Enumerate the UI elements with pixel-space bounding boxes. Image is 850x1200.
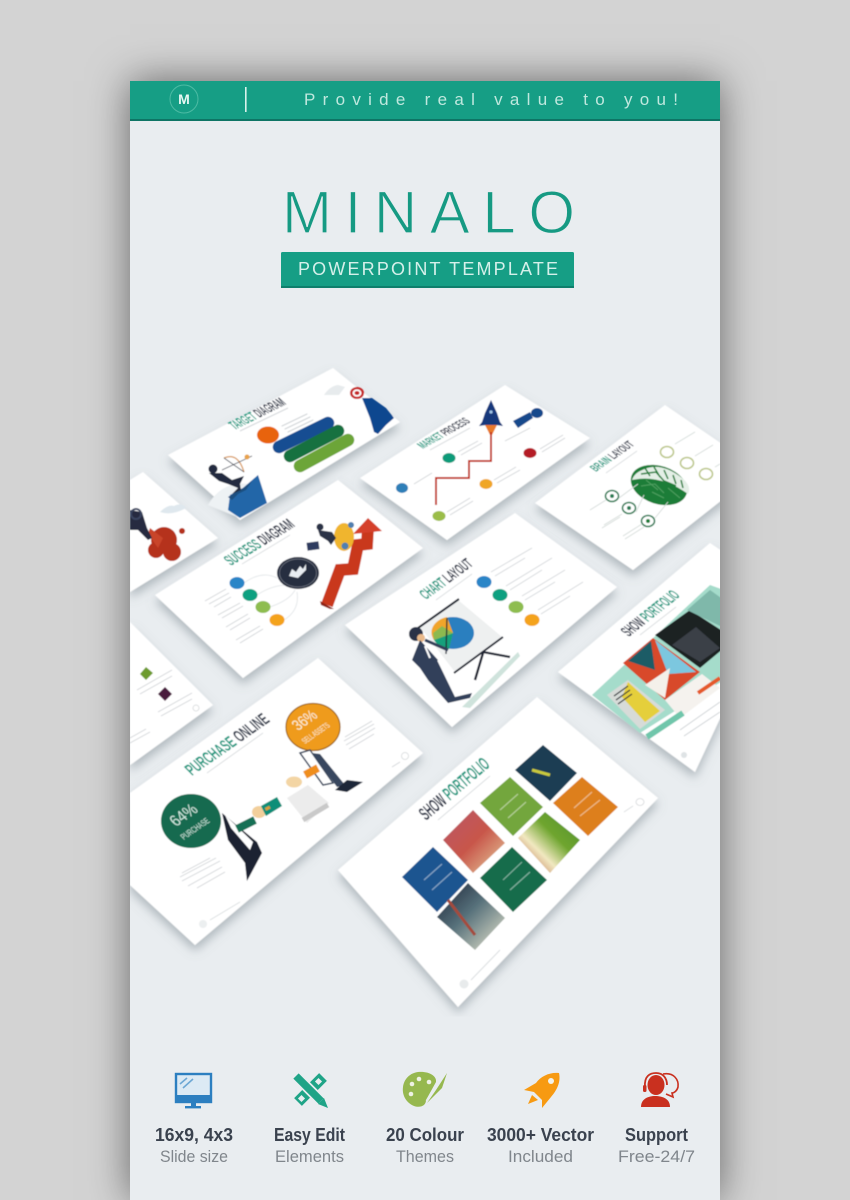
image: yellow card (607, 680, 665, 729)
feature: slide size (155, 1074, 233, 1166)
illustration: shopping bag (287, 785, 329, 823)
icon: target (350, 387, 364, 399)
stair line (436, 432, 491, 505)
connector curves (244, 575, 297, 620)
icon: M logo badge (170, 85, 198, 113)
text lines (590, 432, 720, 539)
header bar (130, 81, 720, 121)
feature: support: Free-24/7 (618, 1147, 695, 1166)
illustration: presentation board (418, 599, 510, 680)
image: white card (665, 674, 720, 718)
slide title: show portfolio: SHOW PORTFOLIO (415, 754, 494, 825)
slide title: success diagram: SUCCESS DIAGRAM (220, 516, 299, 569)
callout: 64% purchase (161, 794, 221, 848)
icon: support agent (641, 1073, 678, 1107)
slide title: purchase online: PURCHASE ONLINE (181, 710, 274, 779)
feature: colour themes (386, 1072, 464, 1166)
slide collage artwork (130, 368, 780, 1007)
slide: success diagram (155, 480, 423, 678)
callout: 36% sell assets: SELL ASSETS (299, 721, 332, 745)
feature: vector icons: Included (508, 1147, 573, 1166)
illustration: archer on cliff (208, 454, 267, 518)
illustration: blue cape (362, 398, 394, 434)
subtitle badge (281, 252, 574, 288)
feature: slide size: Slide size (160, 1147, 228, 1166)
slide title: target diagram: TARGET DIAGRAM (225, 395, 290, 433)
text lines (205, 589, 263, 643)
slide title: chart layout: CHART LAYOUT (417, 556, 477, 603)
illustration: right tablet and hand (286, 750, 363, 792)
icon: M logo badge: M (178, 91, 190, 107)
icon: ruler and pencil (296, 1076, 328, 1108)
feature: colour themes: 20 Colour (386, 1125, 464, 1145)
illustration: rocket (479, 400, 503, 437)
chart: pie (432, 617, 474, 654)
slide: show portfolio large (338, 697, 658, 1007)
header tagline: Provide real value to you! (304, 90, 678, 109)
pill bars (279, 414, 348, 466)
feature: easy edit: Easy Edit (274, 1125, 345, 1145)
feature: slide size: 16x9, 4x3 (155, 1125, 233, 1145)
slide: brain layout (534, 405, 720, 579)
slide: purchase online (130, 658, 423, 945)
feature: easy edit: Elements (275, 1147, 344, 1166)
badge: dark circle (277, 557, 319, 589)
illustration: left tablet and hand (222, 797, 282, 881)
illustration: brain (630, 464, 690, 506)
text lines (414, 428, 565, 515)
slide: market process (360, 385, 590, 540)
icon: palette (403, 1072, 447, 1107)
image: teal photo (687, 590, 720, 626)
slide: target diagram (168, 368, 400, 520)
brain nodes (606, 446, 712, 526)
callout: 36% sell assets: 36% (289, 708, 321, 734)
slide title: show portfolio: SHOW PORTFOLIO (617, 587, 684, 639)
slide title: market process: MARKET PROCESS (414, 416, 473, 451)
text lines (180, 721, 400, 888)
subtitle badge: POWERPOINT TEMPLATE (298, 259, 558, 279)
feature: support (618, 1073, 695, 1166)
feature: support: Support (625, 1125, 688, 1145)
illustration: floor shadow (462, 652, 520, 708)
panel: poster card background (130, 81, 720, 1200)
feature: colour themes: Themes (396, 1147, 454, 1166)
feature: vector icons: 3000+ Vector (487, 1125, 594, 1145)
title: MINALO (282, 179, 575, 246)
portfolio tile grid (402, 745, 618, 950)
illustration: presenter (409, 627, 472, 703)
callout: 64% purchase: PURCHASE (178, 816, 212, 841)
slide collage (130, 368, 780, 1007)
icon: monitor (175, 1074, 212, 1108)
image: red brochure (623, 638, 700, 700)
illustration: red arrow (320, 518, 382, 609)
slide: left lower partial (130, 622, 213, 765)
slide: rocket partial (130, 472, 218, 592)
icon: rocket (524, 1073, 560, 1108)
callout: 36% sell assets (286, 704, 340, 750)
callout: 64% purchase: 64% (165, 800, 202, 830)
image: dark brochure (655, 610, 724, 668)
slide: show portfolio right (556, 543, 720, 780)
slide: chart layout (345, 513, 617, 727)
feature: vector icons (487, 1073, 594, 1166)
image: pale teal base (592, 585, 724, 733)
illustration: businessman (307, 522, 354, 551)
feature: easy edit (274, 1076, 345, 1166)
text lines (491, 548, 583, 614)
slide title: brain layout: BRAIN LAYOUT (587, 439, 638, 474)
